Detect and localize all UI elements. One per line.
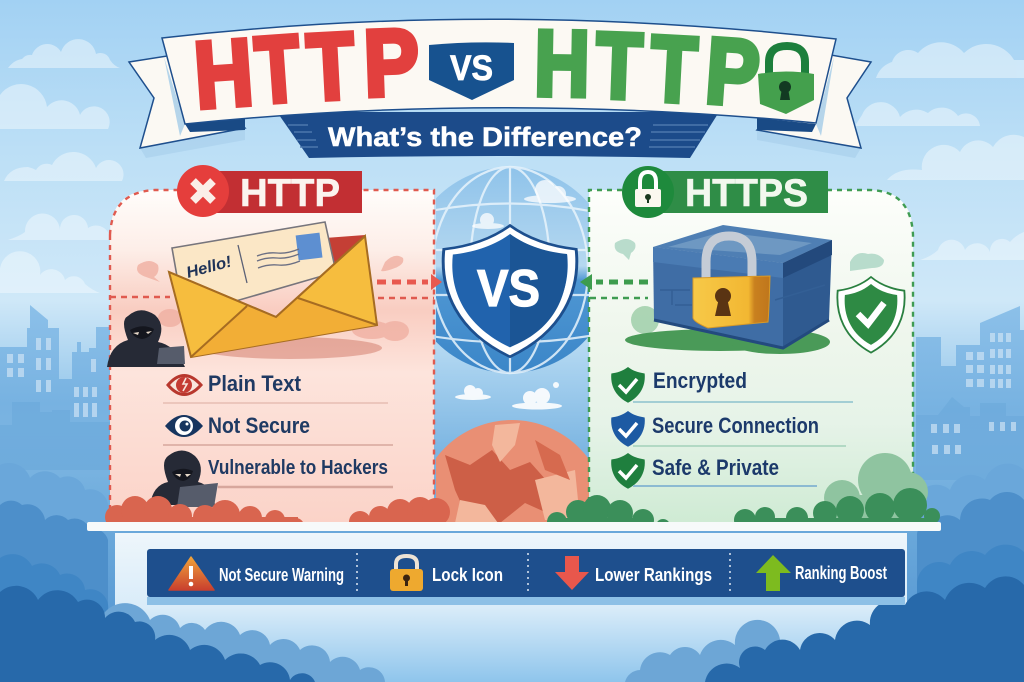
divider	[163, 402, 388, 404]
title: HTTP: T	[305, 13, 357, 120]
ribbon fold shades	[185, 118, 816, 132]
title: HTTP green: H	[534, 11, 590, 116]
divider	[163, 444, 393, 446]
icon: envelope back	[325, 235, 372, 290]
envelope shadow	[198, 337, 382, 359]
far cloud layers	[0, 463, 1024, 682]
badge: HTTPS	[622, 166, 828, 218]
shelf	[87, 522, 941, 531]
red clouds	[105, 496, 450, 522]
title: HTTP green: T	[648, 16, 699, 122]
smoke puffs	[615, 239, 884, 334]
warning icon	[169, 557, 214, 590]
up arrow icon	[756, 555, 791, 591]
icon: envelope	[169, 236, 377, 357]
green clouds	[547, 453, 940, 522]
ribbon tail left	[129, 56, 245, 148]
list item: not secure	[165, 413, 310, 438]
list item: plain text	[168, 371, 302, 396]
list item: secure connection: Secure Connection	[652, 413, 819, 438]
badge: HTTPS: HTTPS	[685, 172, 808, 215]
ribbon tail right	[757, 55, 871, 148]
smoke puffs	[137, 256, 409, 341]
arrow: HTTP to VS	[377, 274, 442, 290]
grass	[625, 329, 830, 354]
list item: encrypted	[611, 367, 853, 403]
ribbon tail creases	[164, 57, 834, 136]
list item: vulnerable to hackers: Vulnerable to Hackers	[208, 457, 388, 479]
badge: HTTP	[177, 165, 362, 217]
label: Lower Rankings	[595, 565, 712, 585]
down arrow icon	[555, 556, 589, 590]
lock icon	[390, 556, 423, 591]
badge: HTTP: HTTP	[240, 172, 340, 215]
panel: HTTPS	[547, 190, 940, 538]
title: HTTP: H	[191, 19, 256, 128]
city skyline left	[0, 305, 110, 470]
list item: encrypted: Encrypted	[653, 368, 747, 393]
icon: title green padlock	[758, 46, 814, 114]
title: HTTP: P	[362, 9, 421, 116]
VS shield	[443, 226, 577, 357]
list item: secure connection	[611, 411, 846, 447]
subtitle ribbon: What’s the Difference?	[328, 122, 642, 152]
shelf backing panel	[115, 533, 907, 682]
label: Not Secure Warning	[219, 565, 344, 585]
list item: not secure: Not Secure	[208, 413, 310, 438]
background clouds	[0, 39, 1024, 293]
subtitle ribbon	[277, 112, 719, 158]
list item: safe and private: Safe & Private	[652, 455, 779, 480]
letter text: Hello!	[185, 253, 234, 282]
panel: HTTP	[105, 190, 450, 534]
sky clouds below globe	[455, 382, 562, 410]
foreground clouds left	[0, 586, 385, 682]
list item: safe and private	[611, 453, 817, 489]
list item: vulnerable to hackers	[150, 450, 393, 507]
title: HTTP green: T	[594, 13, 644, 119]
icon: stone vault box	[653, 225, 832, 348]
title: HTTP green	[534, 11, 763, 126]
earth in danger	[436, 420, 589, 522]
arrow: HTTPS to VS	[580, 274, 648, 290]
ribbon tail shadows	[140, 128, 861, 158]
globe	[436, 166, 589, 374]
VS badge: VS	[450, 49, 493, 88]
title: HTTP green: P	[703, 18, 763, 126]
city skyline right	[916, 306, 1024, 480]
title: HTTP	[191, 9, 421, 128]
label: Lock Icon	[432, 565, 503, 585]
title banner	[129, 9, 871, 158]
title: HTTP: T	[252, 15, 303, 123]
foreground clouds right	[625, 576, 1024, 682]
icon: letter	[172, 222, 336, 316]
legend bar	[147, 549, 905, 605]
VS badge	[429, 42, 514, 100]
list item: plain text: Plain Text	[208, 371, 302, 396]
icon: padlock	[693, 236, 770, 328]
icon: green check shield	[837, 277, 905, 353]
VS shield: VS	[477, 260, 540, 318]
hacker with laptop	[107, 310, 185, 367]
banner body	[162, 19, 836, 124]
label: Ranking Boost	[795, 563, 887, 583]
